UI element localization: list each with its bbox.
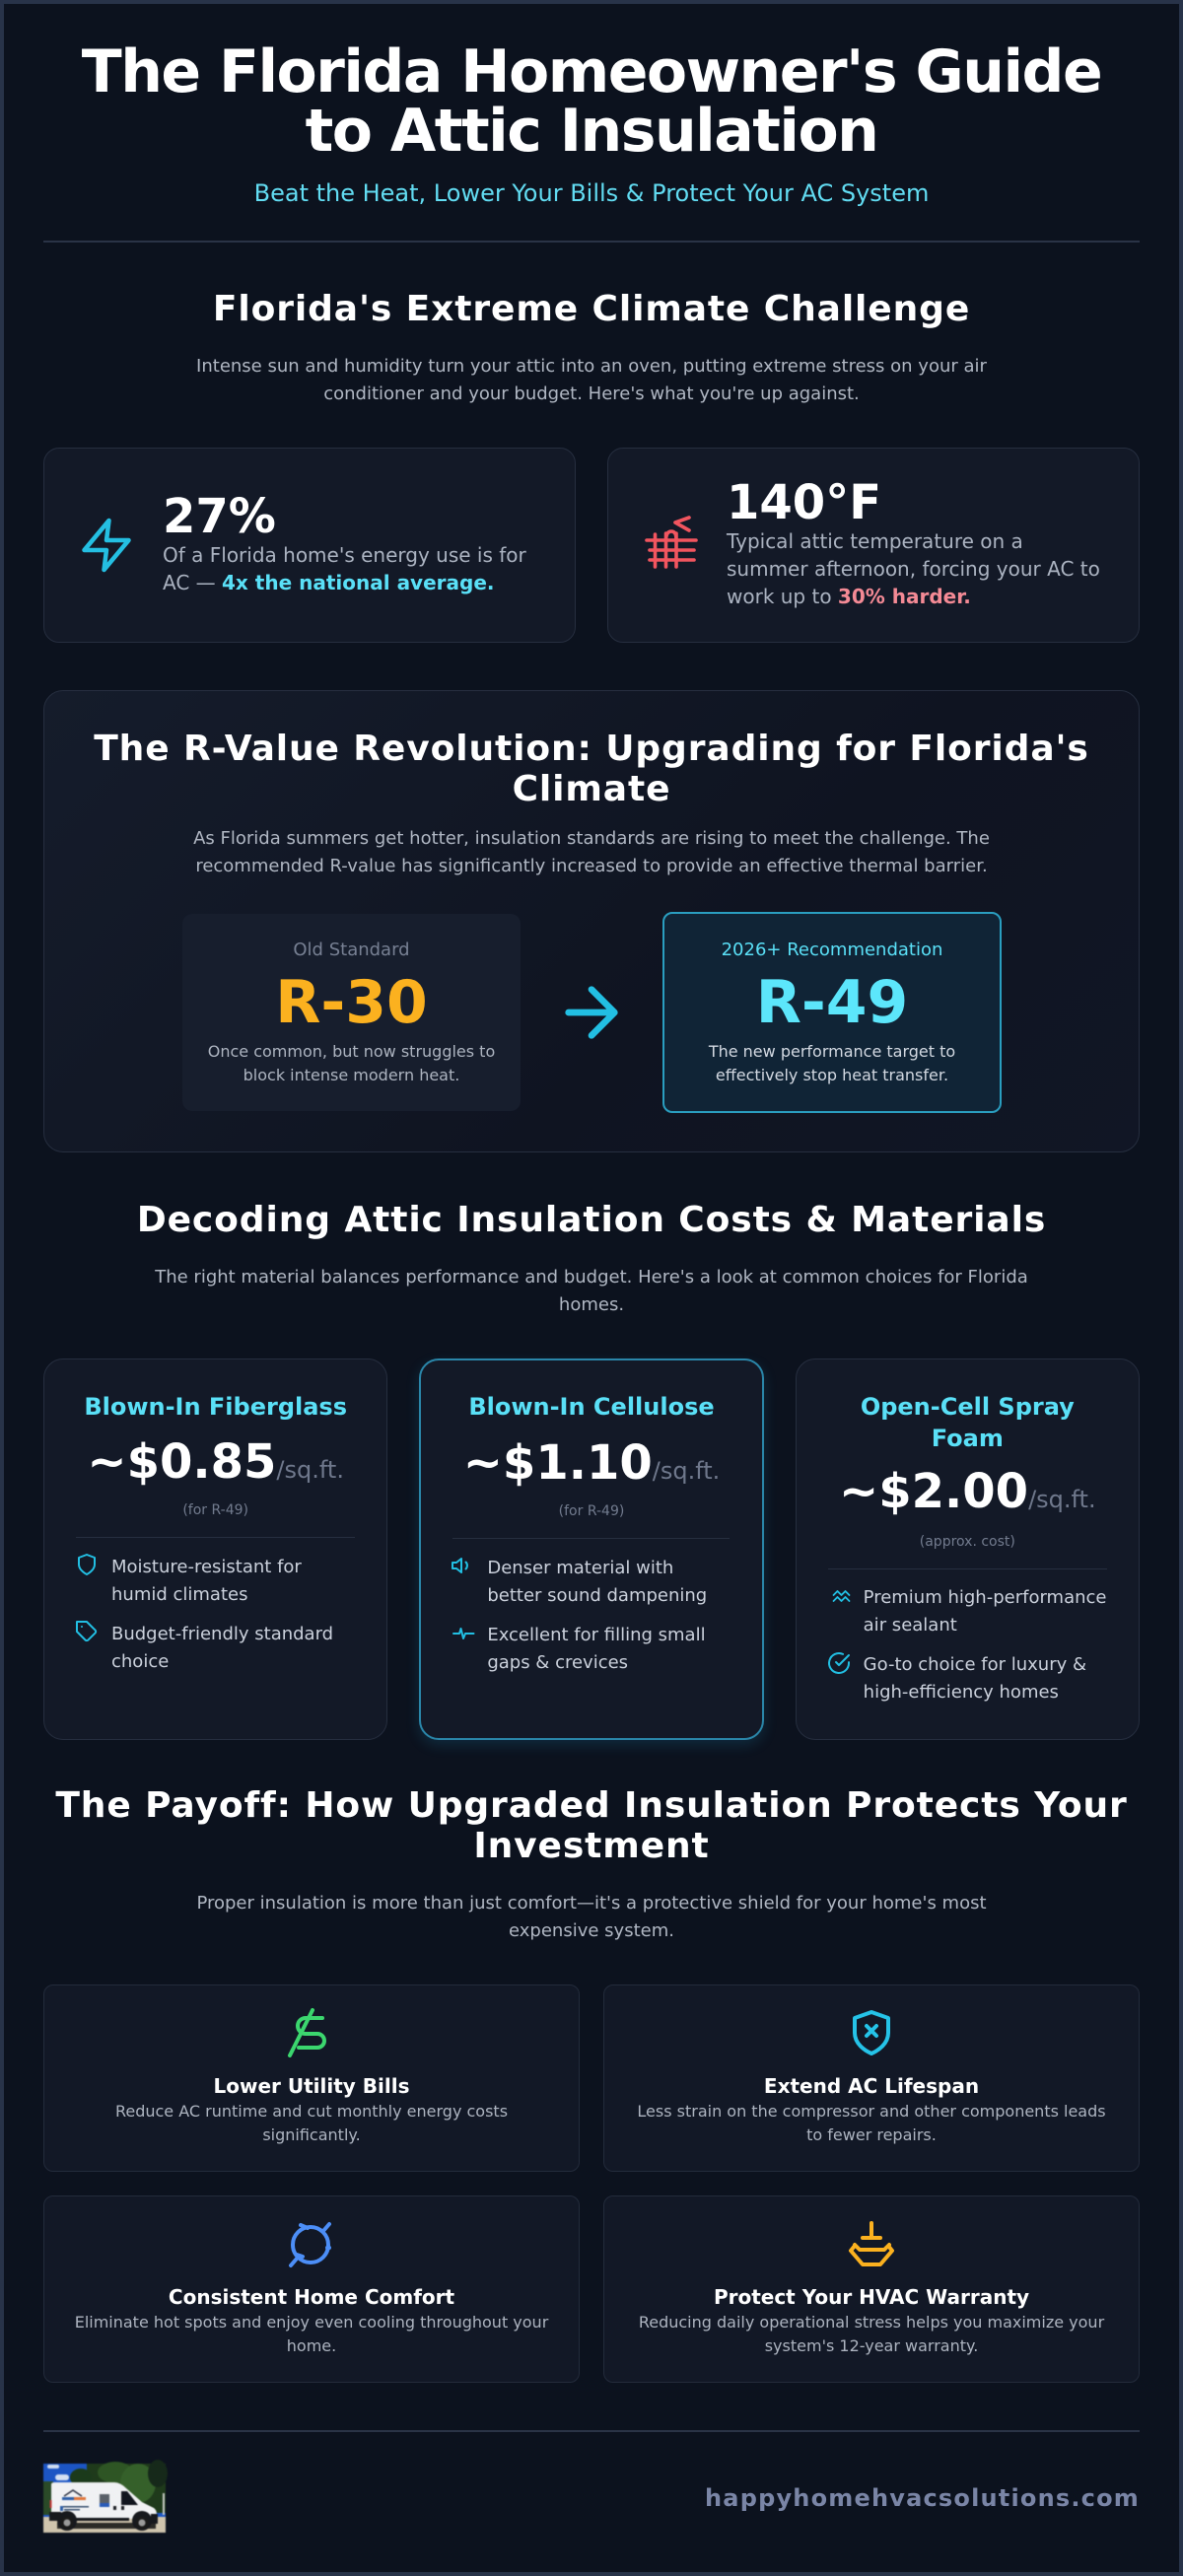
panel: consistent home comfort	[43, 2195, 580, 2383]
feature text: air sealant	[864, 1615, 957, 1636]
old value: R-30	[275, 968, 428, 1037]
old standard box	[182, 914, 521, 1111]
panel: blown-in fiberglass	[43, 1358, 387, 1740]
stat description: Typical attic temperature on a	[727, 529, 1023, 553]
R-value intro text: recommended R-value has significantly increased to provide an effective thermal barrier.	[195, 856, 988, 876]
benefit description: Less strain on the compressor and other components leads	[637, 2102, 1106, 2121]
feature text: humid climates	[111, 1584, 247, 1605]
panel: 140F stat	[607, 448, 1140, 643]
panel: blown-in cellulose	[419, 1358, 764, 1740]
panel: lower utility bills	[43, 1984, 580, 2172]
feature text: better sound dampening	[487, 1585, 707, 1606]
heading: climate challenge: Florida's Extreme Climate Challenge	[213, 289, 970, 329]
climate intro text: Intense sun and humidity turn your attic into an oven, putting extreme stress on your air	[196, 356, 987, 377]
material name: Blown-In Cellulose	[468, 1393, 715, 1421]
icon: arrow	[565, 986, 618, 1039]
icon: refresh circle	[288, 2222, 331, 2267]
stat description	[163, 543, 526, 594]
benefit title: Consistent Home Comfort	[169, 2285, 454, 2309]
new recommendation box	[662, 912, 1002, 1113]
icon: heat grid	[645, 516, 698, 569]
heading: payoff	[55, 1785, 1128, 1866]
title: The Florida Homeowner's Guide	[82, 37, 1101, 106]
icon: pulse	[452, 1628, 475, 1639]
subtitle: Beat the Heat, Lower Your Bills & Protect Your AC System	[254, 179, 929, 207]
feature text: Moisture-resistant for	[111, 1557, 302, 1577]
material name: Open-Cell Spray	[861, 1393, 1075, 1421]
stat description: Of a Florida home's energy use is for	[163, 543, 526, 567]
heading: R-value: Climate	[513, 769, 670, 809]
stat description: work up to 30% harder.	[727, 585, 971, 608]
benefit description: home.	[287, 2336, 336, 2355]
material name	[861, 1393, 1075, 1452]
price note: (for R-49)	[182, 1502, 248, 1518]
icon: tag	[76, 1621, 97, 1642]
price: ~$1.10/sq.ft.	[463, 1435, 720, 1491]
benefit description: Reduce AC runtime and cut monthly energy costs	[115, 2102, 508, 2121]
feature text: Budget-friendly standard	[111, 1624, 333, 1644]
R-value intro text	[193, 828, 990, 876]
heading: payoff: Investment	[473, 1826, 710, 1866]
panel: open-cell spray foam	[796, 1358, 1140, 1740]
feature text	[864, 1654, 1086, 1703]
payoff intro text: expensive system.	[509, 1920, 674, 1941]
climate intro text: conditioner and your budget. Here's what you're up against.	[323, 383, 860, 404]
price note: (for R-49)	[559, 1503, 624, 1519]
R-value intro text: As Florida summers get hotter, insulation standards are rising to meet the challenge. The	[193, 828, 990, 849]
feature text: Go-to choice for luxury &	[864, 1654, 1086, 1675]
payoff intro text: Proper insulation is more than just comfort—it's a protective shield for your home's most	[196, 1893, 987, 1914]
panel: R-value revolution	[43, 690, 1140, 1152]
image: company van	[42, 2460, 168, 2534]
benefit title: Lower Utility Bills	[213, 2074, 410, 2098]
costs intro text	[155, 1267, 1028, 1315]
icon: check circle	[828, 1652, 850, 1674]
stat value: 140°F	[727, 475, 881, 530]
feature text	[487, 1625, 706, 1673]
costs intro text: homes.	[559, 1294, 624, 1315]
old description	[208, 1042, 495, 1084]
price: ~$2.00/sq.ft.	[839, 1464, 1096, 1519]
website address: happyhomehvacsolutions.com	[705, 2484, 1140, 2512]
feature text: high-efficiency homes	[864, 1682, 1059, 1703]
material name: Blown-In Fiberglass	[84, 1393, 347, 1421]
payoff intro text	[196, 1893, 987, 1941]
panel: extend AC lifespan	[603, 1984, 1140, 2172]
costs intro text: The right material balances performance and budget. Here's a look at common choices for Florida	[155, 1267, 1028, 1288]
price: ~$0.85/sq.ft.	[87, 1434, 344, 1490]
feature text	[864, 1587, 1106, 1636]
benefit description: to fewer repairs.	[806, 2125, 937, 2144]
benefit description	[637, 2102, 1106, 2144]
climate intro text	[196, 356, 987, 404]
material name: Foam	[932, 1425, 1004, 1452]
benefit description: significantly.	[262, 2125, 361, 2144]
heading: R-value: The R-Value Revolution: Upgrading for Florida's	[94, 729, 1089, 769]
icon: speaker	[452, 1558, 468, 1573]
title: to Attic Insulation	[306, 97, 877, 166]
benefit description	[75, 2313, 548, 2355]
benefit title: Protect Your HVAC Warranty	[714, 2285, 1029, 2309]
icon: shield x	[853, 2010, 890, 2055]
icon: warranty tray	[848, 2221, 895, 2266]
panel: 27% stat	[43, 448, 576, 643]
feature text	[111, 1624, 333, 1672]
title	[82, 37, 1101, 166]
old description: Once common, but now struggles to	[208, 1042, 495, 1061]
benefit description: Eliminate hot spots and enjoy even cooling throughout your	[75, 2313, 548, 2332]
feature text: gaps & crevices	[487, 1652, 628, 1673]
benefit description: Reducing daily operational stress helps you maximize your	[639, 2313, 1104, 2332]
heading: R-value	[94, 729, 1089, 809]
heading: payoff: The Payoff: How Upgraded Insulation Protects Your	[55, 1785, 1128, 1826]
feature text: choice	[111, 1651, 169, 1672]
new description: effectively stop heat transfer.	[716, 1066, 948, 1084]
new label: 2026+ Recommendation	[722, 940, 942, 960]
feature text: Denser material with	[487, 1558, 673, 1578]
new value: R-49	[756, 968, 908, 1037]
price note: (approx. cost)	[920, 1534, 1015, 1550]
benefit description	[115, 2102, 508, 2144]
benefit description: system's 12-year warranty.	[765, 2336, 978, 2355]
benefit description	[639, 2313, 1104, 2355]
stat value: 27%	[163, 489, 276, 544]
old label: Old Standard	[293, 940, 410, 960]
icon: waves	[832, 1590, 850, 1602]
icon: dollar	[288, 2007, 326, 2058]
old description: block intense modern heat.	[244, 1066, 459, 1084]
feature text: Excellent for filling small	[487, 1625, 706, 1645]
benefit title: Extend AC Lifespan	[764, 2074, 979, 2098]
heading: costs: Decoding Attic Insulation Costs & Materials	[137, 1200, 1046, 1240]
new description: The new performance target to	[709, 1042, 955, 1061]
icon: lightning bolt	[82, 519, 131, 572]
stat description	[726, 529, 1100, 608]
feature text	[111, 1557, 302, 1605]
stat description: summer afternoon, forcing your AC to	[727, 557, 1100, 581]
feature text: Premium high-performance	[864, 1587, 1106, 1608]
feature text	[487, 1558, 707, 1606]
icon: shield	[78, 1554, 96, 1575]
stat description: AC — 4x the national average.	[163, 571, 495, 594]
new description	[708, 1042, 955, 1084]
panel: protect HVAC warranty	[603, 2195, 1140, 2383]
